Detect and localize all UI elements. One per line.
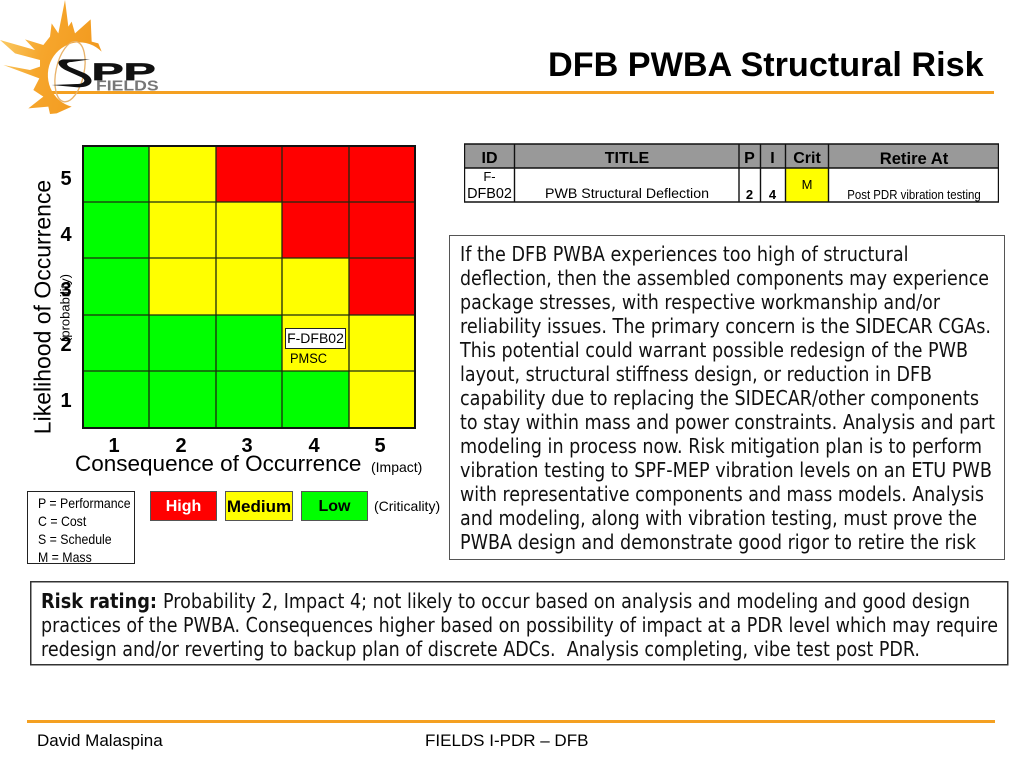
y axis numbers: 4 <box>60 224 72 246</box>
risk table: PWB Structural Deflection <box>545 186 709 202</box>
risk table: TITLE <box>605 150 649 167</box>
risk table: F- <box>483 169 496 184</box>
legend: categories: S = Schedule <box>38 531 112 547</box>
footer rule <box>27 720 995 723</box>
risk table: Retire At <box>880 149 948 168</box>
risk table: P <box>744 150 755 167</box>
legend: medium <box>225 491 293 521</box>
y axis numbers: 3 <box>60 279 72 301</box>
risk table: I <box>770 150 775 167</box>
y axis numbers <box>60 168 72 412</box>
logo: PP <box>92 59 156 86</box>
x axis numbers <box>108 435 386 457</box>
risk table: M <box>802 177 812 192</box>
y axis numbers: 2 <box>60 334 72 356</box>
title: DFB PWBA Structural Risk <box>548 46 984 84</box>
risk table: DFB02 <box>467 186 512 202</box>
legend: high <box>150 491 217 521</box>
x axis numbers: 4 <box>308 435 320 457</box>
marker owner PMSC: PMSC <box>290 351 327 366</box>
legend: categories: C = Cost <box>38 513 86 529</box>
legend: criticality label: (Criticality) <box>374 498 440 514</box>
x axis subtitle: (Impact) <box>371 459 422 475</box>
description box: If the DFB PWBA experiences too high of structural <box>460 242 908 266</box>
risk table: 2 <box>746 187 753 202</box>
risk rating box <box>30 581 1008 666</box>
legend: low <box>301 491 368 521</box>
legend: categories: P = Performance <box>38 495 131 511</box>
x axis numbers: 5 <box>374 435 386 457</box>
risk table: 4 <box>769 187 776 202</box>
y axis numbers: 5 <box>60 168 72 190</box>
description box <box>449 235 1005 560</box>
risk table <box>464 143 999 203</box>
logo <box>0 0 159 114</box>
logo: FIELDS <box>96 79 159 95</box>
x axis numbers: 2 <box>175 435 187 457</box>
risk table: Crit <box>793 150 821 167</box>
y axis numbers: 1 <box>60 390 72 412</box>
legend: medium: Medium <box>227 497 291 516</box>
legend: categories: M = Mass <box>38 549 92 565</box>
legend: high: High <box>166 498 201 515</box>
risk table: Post PDR vibration testing <box>847 187 981 202</box>
description box: layout, structural stiffness design, or reduction in DFB <box>460 362 932 386</box>
header rule <box>46 91 994 94</box>
risk rating box: Risk rating: <box>41 589 157 613</box>
x axis title: Consequence of Occurrence <box>75 451 361 476</box>
risk matrix <box>82 145 416 429</box>
x axis numbers: 1 <box>108 435 120 457</box>
risk marker F-DFB02: F-DFB02 <box>287 330 344 346</box>
description box: package stresses, with respective workmanship and/or <box>460 290 941 314</box>
x axis numbers: 3 <box>241 435 253 457</box>
footer event: FIELDS I-PDR – DFB <box>425 731 588 750</box>
risk table: ID <box>482 150 498 167</box>
y axis subtitle: (probability) <box>58 274 72 342</box>
legend: low: Low <box>318 498 350 515</box>
footer author: David Malaspina <box>37 731 163 750</box>
y axis title: Likelihood of Occurrence <box>30 180 56 434</box>
legend: categories <box>27 491 135 564</box>
